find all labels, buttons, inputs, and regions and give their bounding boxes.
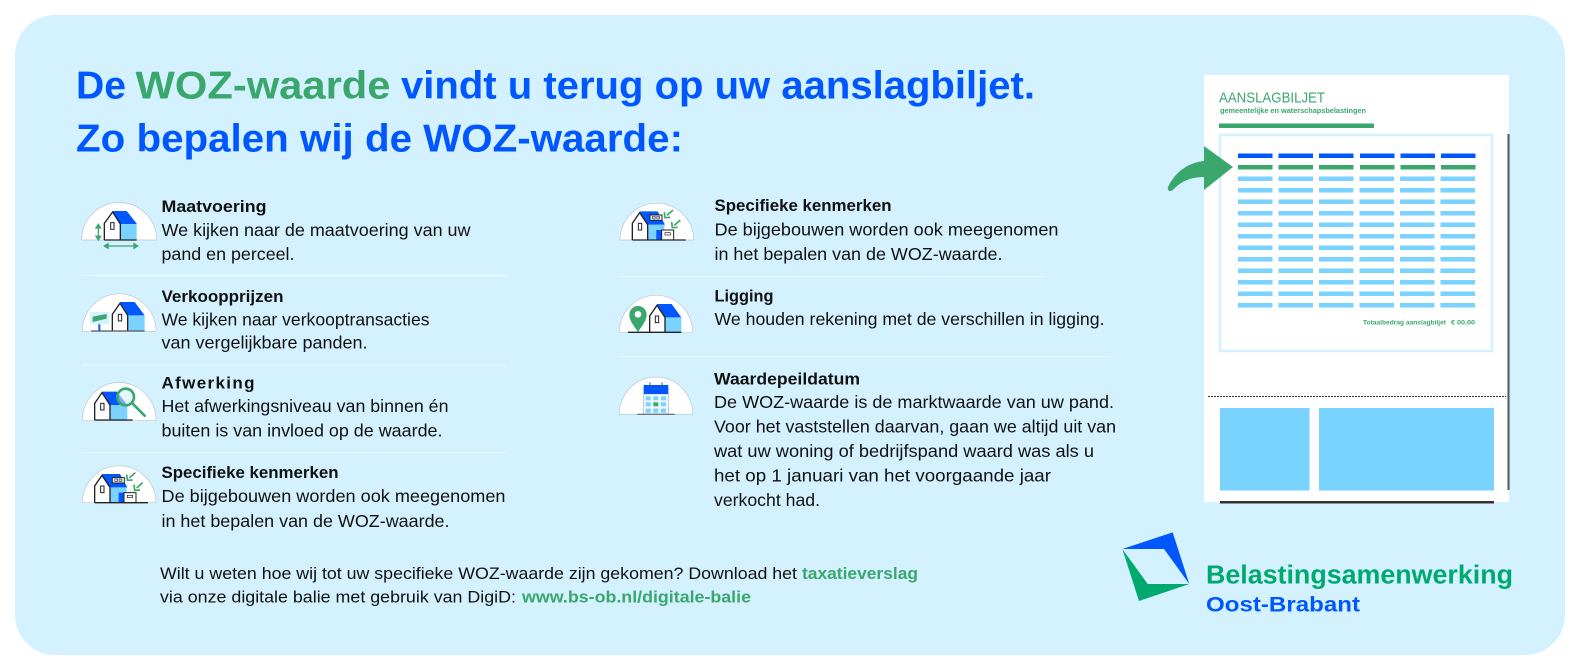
logo text [1206, 562, 1513, 616]
icon: house with location pin [619, 295, 693, 333]
text: We kijken naar verkooptransacties [162, 310, 430, 330]
icon: house with annexes [620, 203, 694, 240]
icon: house with sale sign [82, 294, 156, 331]
text [714, 286, 1104, 329]
logo [1122, 532, 1513, 616]
text: We kijken naar de maatvoering van uw [162, 220, 471, 240]
text: Voor het vaststellen daarvan, gaan we altijd uit van [714, 416, 1116, 436]
text: Waardepeildatum [714, 370, 860, 388]
title: vindt u terug op uw aanslagbiljet. [401, 64, 1035, 108]
text: verkocht had. [714, 490, 820, 510]
text [162, 197, 471, 264]
text: De bijgebouwen worden ook meegenomen [714, 220, 1058, 240]
text: Specifieke kenmerken [162, 463, 338, 482]
table: € 00,00 [1451, 320, 1475, 326]
text: Afwerking [162, 374, 254, 392]
footer text: www.bs-ob.nl/digitale-balie [521, 588, 751, 606]
title: WOZ-waarde [136, 64, 390, 108]
title: Zo bepalen wij de WOZ-waarde: [76, 118, 683, 160]
item: Waardepeildatum [619, 370, 1116, 510]
text: De WOZ-waarde is de marktwaarde van uw pand. [714, 392, 1114, 412]
footer text [160, 564, 918, 606]
logo text: Oost-Brabant [1206, 594, 1360, 616]
footer text: taxatieverslag [802, 564, 918, 583]
icon: house with dimensions [82, 202, 157, 248]
document heading: gemeentelijke en waterschapsbelastingen [1220, 108, 1366, 115]
arrow [1168, 146, 1233, 191]
item: Specifieke kenmerken (right) [620, 196, 1058, 264]
text [714, 196, 1058, 264]
text: Maatvoering [162, 197, 266, 216]
text: Specifieke kenmerken [714, 196, 892, 215]
text: Het afwerkingsniveau van binnen én [162, 396, 448, 416]
text: van vergelijkbare panden. [162, 332, 368, 352]
dividers [82, 276, 1110, 452]
text [162, 463, 506, 531]
text: wat uw woning of bedrijfspand waard was als u [713, 441, 1094, 461]
logo text: Belastingsamenwerking [1206, 562, 1513, 590]
text [162, 374, 448, 440]
payment slip blocks [1220, 408, 1494, 490]
title: De [76, 64, 126, 108]
panel: aanslagbiljet document [1204, 75, 1510, 504]
text: in het bepalen van de WOZ-waarde. [162, 511, 450, 531]
table: Totaalbedrag aanslagbiljet [1363, 320, 1447, 326]
text: Ligging [714, 286, 774, 306]
item: Specifieke kenmerken (left) [82, 463, 506, 531]
item: Maatvoering [82, 197, 471, 264]
item: Verkoopprijzen [82, 287, 430, 352]
item: Afwerking [82, 374, 449, 440]
text: pand en perceel. [162, 244, 294, 264]
document heading: AANSLAGBILJET [1219, 90, 1325, 106]
text: Verkoopprijzen [162, 287, 284, 306]
text: buiten is van invloed op de waarde. [162, 420, 442, 440]
footer text: Wilt u weten hoe wij tot uw specifieke WOZ-waarde zijn gekomen? Download het [160, 564, 797, 583]
document heading [1219, 90, 1374, 128]
text: We houden rekening met de verschillen in ligging. [714, 309, 1104, 329]
text: De bijgebouwen worden ook meegenomen [162, 486, 506, 506]
icon: house with magnifier [82, 382, 156, 421]
footer text: via onze digitale balie met gebruik van DigiD: [160, 588, 516, 606]
item: Ligging [619, 286, 1104, 333]
icon: calendar [619, 377, 693, 414]
table [1220, 135, 1492, 351]
text [713, 370, 1116, 510]
title [76, 64, 1035, 160]
icon: house with annexes [82, 466, 156, 503]
text: in het bepalen van de WOZ-waarde. [714, 244, 1002, 264]
text: het op 1 januari van het voorgaande jaar [714, 466, 1051, 486]
text [162, 287, 430, 352]
logo mark [1122, 532, 1189, 601]
